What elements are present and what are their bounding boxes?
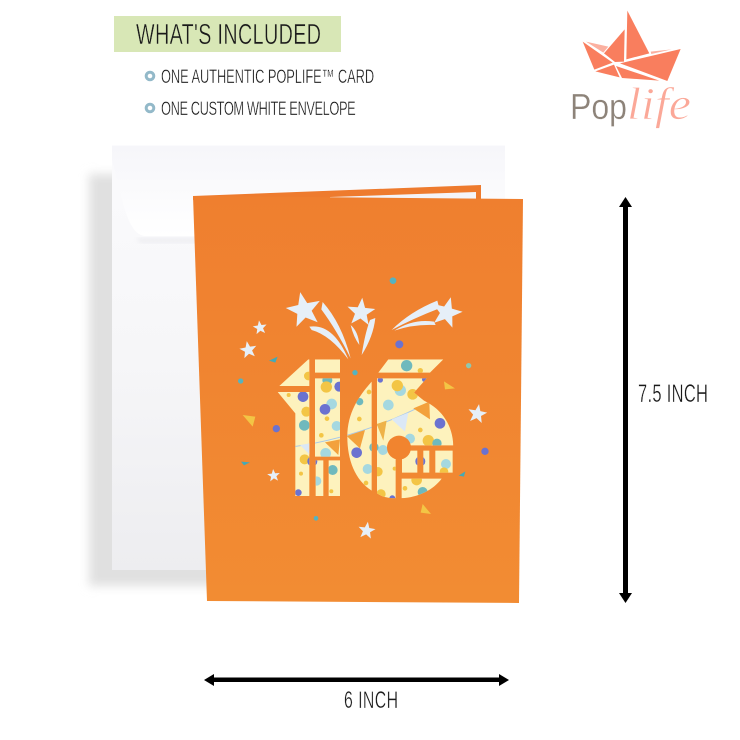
bullet 2 xyxy=(146,104,154,112)
bullet 1 xyxy=(146,72,154,80)
card back edge xyxy=(193,185,481,200)
height label: 7.5 INCH xyxy=(638,381,708,408)
item 1 text: ONE AUTHENTIC POPLIFE™ CARD xyxy=(161,65,374,88)
height arrow xyxy=(619,197,632,603)
envelope with shadow xyxy=(89,145,505,586)
bunting xyxy=(294,402,430,447)
wordmark Pop: Pop xyxy=(570,86,627,127)
wordmark life: life xyxy=(627,78,691,129)
width label: 6 INCH xyxy=(344,688,398,714)
envelope body xyxy=(112,145,505,570)
card inner gap xyxy=(330,192,476,199)
orange pop-up card xyxy=(193,185,523,603)
included items list xyxy=(146,65,374,120)
flap shadow xyxy=(136,238,505,243)
heading text: WHAT'S INCLUDED xyxy=(136,19,321,51)
envelope flap xyxy=(112,146,505,236)
card artwork: 16 and fireworks xyxy=(238,277,489,539)
envelope shadow xyxy=(89,174,239,586)
width arrow xyxy=(204,674,509,686)
heading band xyxy=(114,16,341,52)
item 2 text: ONE CUSTOM WHITE ENVELOPE xyxy=(161,97,356,120)
number 16 cutout xyxy=(273,357,457,501)
confetti xyxy=(238,277,489,521)
card front xyxy=(193,196,523,603)
header: what's included xyxy=(114,16,341,52)
fireworks stars xyxy=(238,288,488,539)
paper boat icon xyxy=(583,11,681,81)
6 center hole xyxy=(387,436,411,460)
logo: Poplife xyxy=(570,11,691,129)
